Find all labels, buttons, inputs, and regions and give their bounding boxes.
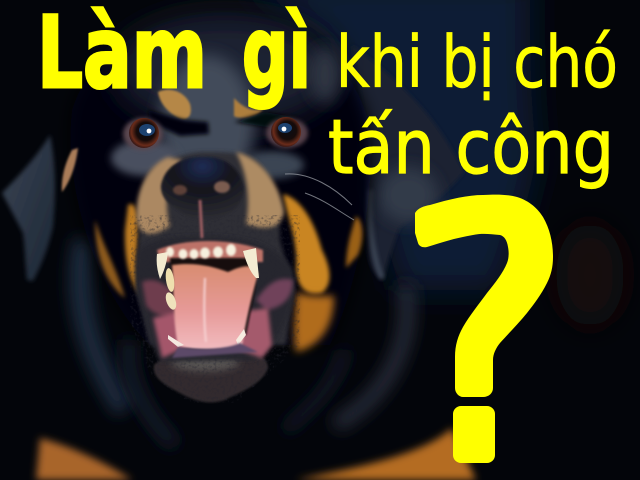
right lip [256, 279, 293, 310]
whiskers [285, 174, 354, 220]
upper gum [157, 241, 263, 262]
nose groove [200, 200, 202, 238]
mouth surround fur [136, 236, 294, 362]
upper incisors [166, 244, 236, 259]
brow spot right [234, 98, 264, 118]
chin [154, 349, 268, 402]
lower lip [172, 343, 258, 358]
tan cheek left [125, 204, 141, 295]
question mark hook [415, 195, 553, 397]
blue fur sheen on neck left [80, 240, 125, 410]
chest tan left [36, 438, 132, 480]
side teeth [164, 268, 176, 292]
lower teeth [168, 335, 184, 347]
mouth interior [170, 258, 256, 340]
tan muzzle left [137, 157, 182, 234]
grey fur sheen on neck right [335, 285, 407, 425]
left fang [157, 252, 168, 279]
right ear [352, 45, 464, 281]
dark muzzle fur [136, 152, 294, 345]
tan cheek right [283, 194, 330, 294]
brow spot left [158, 90, 191, 119]
nose [161, 157, 244, 238]
right fang [243, 248, 259, 278]
fur texture [130, 215, 300, 405]
question mark [415, 195, 553, 463]
tan muzzle right [236, 152, 284, 228]
left ear [2, 135, 55, 281]
dog body [36, 240, 476, 480]
left lip [142, 280, 178, 318]
nostrils [173, 185, 187, 195]
right eye [266, 117, 308, 148]
chest tan right [296, 428, 476, 480]
muzzle and tan markings [95, 152, 362, 352]
dog head [62, 12, 371, 345]
mouth [142, 241, 293, 358]
left eye [123, 118, 163, 150]
tongue [172, 264, 258, 350]
question mark dot [453, 406, 495, 463]
dark brow marks [148, 110, 209, 136]
dog ears [2, 45, 464, 281]
left ear inner tan [62, 148, 78, 192]
